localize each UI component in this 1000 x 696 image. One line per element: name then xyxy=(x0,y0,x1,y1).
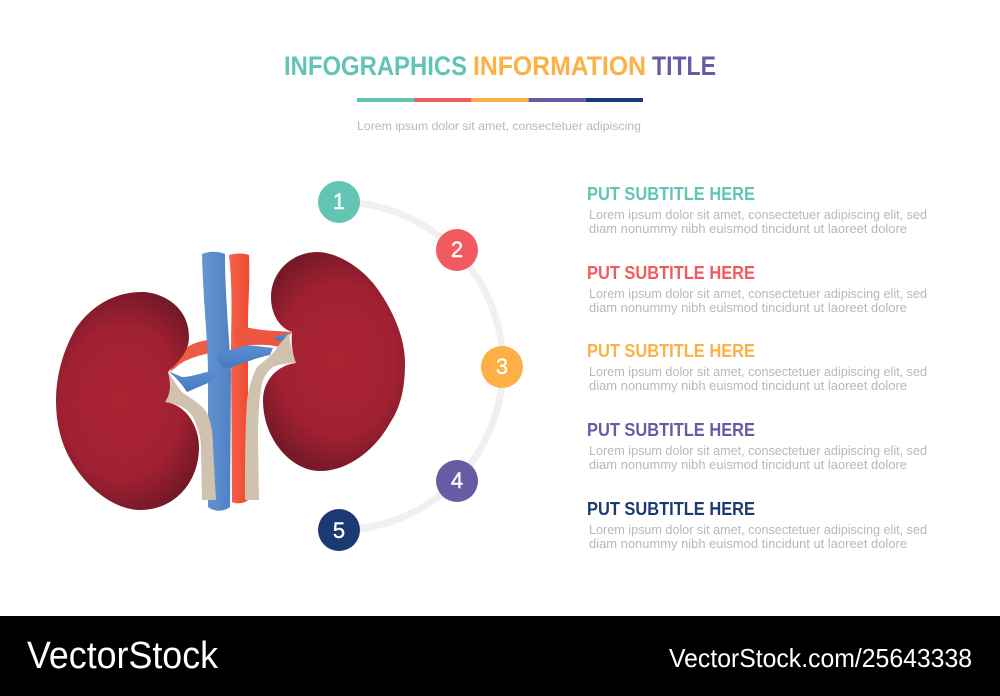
watermark footer: VectorStock xyxy=(27,635,219,677)
illustration: kidneys xyxy=(56,252,405,511)
text block 3: PUT SUBTITLE HERE xyxy=(587,341,755,361)
connecting arc xyxy=(339,202,503,530)
text block 4 xyxy=(587,420,927,472)
title: INFOGRAPHICS xyxy=(284,51,467,81)
step marker 5: 5 xyxy=(333,518,345,543)
text block 5 xyxy=(587,499,927,551)
text block 2: PUT SUBTITLE HERE xyxy=(587,263,755,283)
title xyxy=(284,51,716,81)
text block 1 xyxy=(587,184,927,236)
text block 4: diam nonummy nibh euismod tincidunt ut laoreet dolore xyxy=(589,458,907,472)
text block 2 xyxy=(587,263,927,315)
renal veins xyxy=(168,333,290,392)
left kidney xyxy=(56,292,199,510)
step marker 1: 1 xyxy=(333,189,345,214)
watermark footer: VectorStock.com/25643338 xyxy=(669,643,972,673)
title colour bar xyxy=(357,98,643,102)
text block 1: Lorem ipsum dolor sit amet, consectetuer adipiscing elit, sed xyxy=(589,208,927,222)
step marker 2: 2 xyxy=(451,237,463,262)
inferior vena cava and aorta xyxy=(202,252,249,511)
title: INFORMATION xyxy=(473,51,646,81)
text block 3: diam nonummy nibh euismod tincidunt ut laoreet dolore xyxy=(589,379,907,393)
text block 1: PUT SUBTITLE HERE xyxy=(587,184,755,204)
text block 5: diam nonummy nibh euismod tincidunt ut laoreet dolore xyxy=(589,537,907,551)
step marker 4: 4 xyxy=(451,468,463,493)
text block 5: Lorem ipsum dolor sit amet, consectetuer adipiscing elit, sed xyxy=(589,523,927,537)
text block 5: PUT SUBTITLE HERE xyxy=(587,499,755,519)
right kidney xyxy=(263,252,405,471)
text block 3 xyxy=(587,341,927,393)
step marker 4 xyxy=(436,460,478,502)
text block 4: Lorem ipsum dolor sit amet, consectetuer adipiscing elit, sed xyxy=(589,444,927,458)
ureters xyxy=(165,333,296,500)
left renal artery xyxy=(170,340,210,372)
step marker 5 xyxy=(318,509,360,551)
step marker 3: 3 xyxy=(496,354,508,379)
text block 2: Lorem ipsum dolor sit amet, consectetuer adipiscing elit, sed xyxy=(589,287,927,301)
title: TITLE xyxy=(652,51,716,81)
text block 2: diam nonummy nibh euismod tincidunt ut laoreet dolore xyxy=(589,301,907,315)
text block 4: PUT SUBTITLE HERE xyxy=(587,420,755,440)
text block 3: Lorem ipsum dolor sit amet, consectetuer adipiscing elit, sed xyxy=(589,365,927,379)
step marker 3 xyxy=(481,346,523,388)
right renal artery xyxy=(234,327,292,347)
text block 1: diam nonummy nibh euismod tincidunt ut laoreet dolore xyxy=(589,222,907,236)
step marker 2 xyxy=(436,229,478,271)
title caption: Lorem ipsum dolor sit amet, consectetuer adipiscing xyxy=(357,119,641,133)
watermark footer xyxy=(0,616,1000,696)
step marker 1 xyxy=(318,181,360,223)
